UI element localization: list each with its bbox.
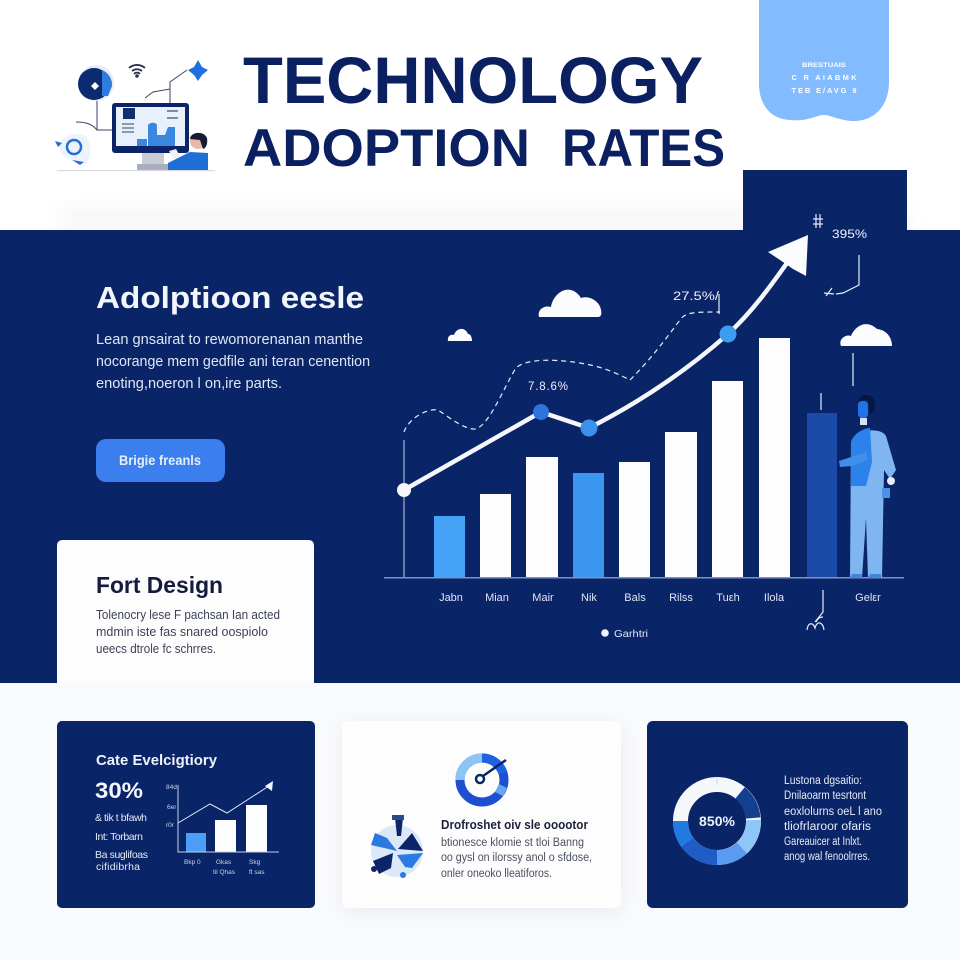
header badge [759, 0, 889, 121]
card text: tliofrlaroor ofaris [784, 821, 871, 833]
axis labels: Gelεr [855, 592, 881, 604]
mini bar chart: Gkas [216, 859, 232, 866]
card text: ueecs dtrole fc schrres. [96, 642, 216, 656]
title: RATES [562, 119, 725, 178]
legend: Garhtri [614, 628, 648, 640]
title: ADOPTION [243, 119, 530, 178]
axis labels [439, 592, 881, 604]
value labels: 27.5%/ [673, 291, 720, 303]
mini bar chart: Skg [249, 859, 261, 866]
panel: main navy band [0, 170, 960, 683]
axis labels: Mian [485, 592, 509, 604]
stat notes: Int: Torbarn [95, 831, 143, 843]
icon: gauge [460, 758, 506, 802]
mini bar chart [166, 781, 279, 876]
intro text block: Lean gnsairat to rewomorenanan manthe [96, 332, 363, 348]
button [96, 439, 225, 482]
card text: btionesce klomie st tloi Banng [441, 837, 584, 849]
panel: evaluation card [57, 721, 315, 908]
stat: 30% [95, 778, 143, 803]
mini bar chart: 84d [166, 784, 177, 791]
icon: pie with figure [371, 815, 423, 878]
button: Brigie freanls [119, 452, 201, 468]
card text [784, 775, 882, 863]
donut chart [680, 778, 754, 858]
header badge: BRESTUAIS [802, 62, 847, 69]
stat notes: cifidibrha [96, 861, 140, 873]
value labels: 7.8.6% [528, 381, 568, 393]
donut value: 850% [699, 813, 736, 829]
icon: standing person [839, 395, 896, 578]
trend line with arrow [397, 235, 808, 497]
intro text block: enoting,noeron l on,ire parts. [96, 376, 282, 392]
title: TECHNOLOGY [243, 43, 703, 117]
card heading: Fort Design [96, 572, 223, 598]
mini bar chart: r0r [166, 822, 175, 829]
header badge: TEB E/AVG 9 [792, 86, 856, 95]
small annotation marks [719, 214, 859, 630]
panel: dashboard card [342, 721, 621, 908]
card text [441, 837, 592, 880]
header badge: C R AIABMK [792, 73, 857, 82]
card heading: Drofroshet oiv sle ooootor [441, 818, 588, 832]
title [243, 43, 725, 178]
header illustration: person at computer with network icons [55, 60, 215, 171]
section heading: Adolptioon eesle [96, 280, 364, 315]
value labels: 395% [832, 229, 867, 241]
intro text block [96, 332, 370, 392]
dashed annotation lines [404, 312, 720, 432]
axis labels: Jabn [439, 592, 463, 604]
mini bar chart: til Qhas [213, 869, 236, 876]
card text: Lustona dgsaitio: [784, 775, 862, 787]
value labels [528, 229, 867, 393]
card text: oo gysl on ilorssy anol o sfdose, [441, 852, 592, 864]
card text: Dnilaoarm tesrtont [784, 790, 867, 802]
card heading: Cate Evelcigtiory [96, 752, 218, 769]
card text [96, 608, 280, 656]
card text: anog wal fenoolrres. [784, 851, 870, 863]
card text: Tolenocry lese F pachsan Ian acted [96, 608, 280, 622]
axis labels: Ilola [764, 592, 785, 604]
clouds [448, 290, 892, 346]
axis labels: Nik [581, 592, 597, 604]
stat notes: Ba suglifoas [95, 849, 148, 861]
card text: Gareauicer at Inlxt. [784, 836, 862, 848]
axis labels: Rilss [669, 592, 693, 604]
mini bar chart: 6er [167, 804, 177, 811]
card text: mdmin iste fas snared oospiolo [96, 625, 268, 639]
axis labels: Bals [624, 592, 646, 604]
intro text block: nocorange mem gedfile ani teran cenention [96, 354, 370, 370]
card text: eoxlolurns oeL l ano [784, 806, 882, 818]
stat notes [95, 812, 148, 873]
axis labels: Mair [532, 592, 554, 604]
panel: font design card [57, 540, 314, 683]
legend [601, 628, 648, 640]
axis labels: Tuεh [716, 592, 740, 604]
mini bar chart: ft sas [249, 869, 265, 876]
mini bar chart: Bkp 0 [184, 859, 201, 866]
stat notes: & tik t bfawh [95, 812, 147, 824]
card text: onler oneoko lleatiforos. [441, 868, 552, 880]
bar chart [384, 338, 904, 578]
panel: donut card [647, 721, 908, 908]
